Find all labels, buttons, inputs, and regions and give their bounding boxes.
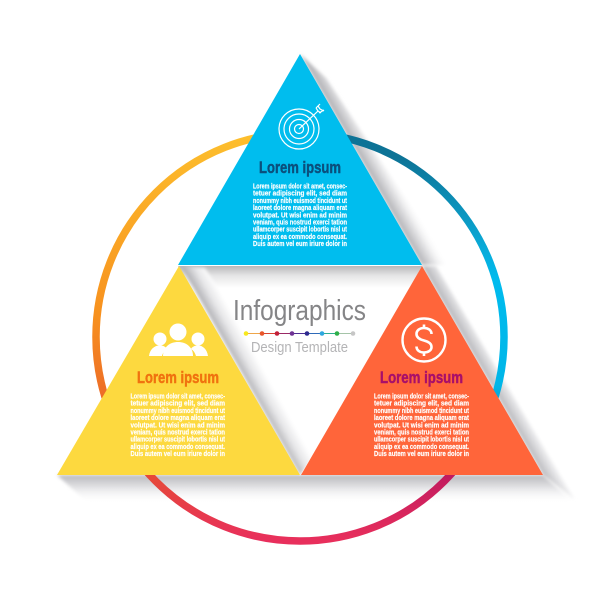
text block: right: veniam, quis nostrud exerci tation bbox=[374, 430, 469, 436]
infographic canvas bbox=[57, 54, 570, 545]
panel: top triangle bbox=[178, 54, 422, 265]
text block: left: nonummy nibh euismod tincidunt ut bbox=[130, 408, 226, 415]
text block: left: Lorem ipsum dolor sit amet, consec- bbox=[130, 394, 226, 400]
text block: left: tetuer adipiscing elit, sed diam bbox=[130, 401, 225, 408]
heading: right: Lorem ipsum bbox=[380, 368, 463, 387]
text block: left: ullamcorper suscipit lobortis nisl ut bbox=[130, 437, 226, 444]
icon: target with arrow bbox=[279, 104, 324, 149]
heading: top: Lorem ipsum bbox=[259, 158, 341, 177]
text block: right: volutpat. Ut wisi enim ad minim bbox=[374, 422, 469, 429]
text block: top bbox=[253, 184, 348, 248]
text block: right: aliquip ex ea commodo consequat. bbox=[374, 444, 469, 451]
text block: top: nonummy nibh euismod tincidunt ut bbox=[253, 198, 348, 205]
heading: left: Lorem ipsum bbox=[137, 368, 219, 387]
central panel bbox=[170, 266, 430, 476]
text block: top: veniam, quis nostrud exerci tation bbox=[253, 220, 347, 226]
shadow: right triangle right side bbox=[422, 266, 575, 500]
text block: left bbox=[130, 394, 226, 458]
icon: dollar coin bbox=[402, 318, 446, 362]
text block: left: veniam, quis nostrud exerci tation bbox=[130, 430, 225, 436]
panel: left triangle bbox=[57, 266, 300, 475]
text block: right: Lorem ipsum dolor sit amet, consec- bbox=[374, 394, 470, 400]
circular ring bbox=[96, 133, 504, 541]
text block: top: laoreet dolore magna aliquam erat bbox=[253, 205, 348, 212]
text block: right bbox=[374, 394, 470, 458]
subtitle: Design Template bbox=[251, 340, 348, 356]
icon: people bbox=[149, 324, 208, 356]
text block: top: aliquip ex ea commodo consequat. bbox=[253, 234, 347, 241]
text block: top: Duis autem vel eum iriure dolor in bbox=[253, 241, 347, 248]
text block: top: volutpat. Ut wisi enim ad minim bbox=[253, 212, 347, 219]
text block: right: laoreet dolore magna aliquam erat bbox=[374, 415, 470, 422]
text block: left: aliquip ex ea commodo consequat. bbox=[130, 444, 225, 451]
text block: top: Lorem ipsum dolor sit amet, consec- bbox=[253, 184, 348, 190]
text block: left: volutpat. Ut wisi enim ad minim bbox=[130, 422, 225, 429]
text block: right: nonummy nibh euismod tincidunt ut bbox=[374, 408, 470, 415]
panel: right triangle bbox=[301, 266, 543, 475]
title: Infographics bbox=[233, 295, 366, 327]
text block: right: tetuer adipiscing elit, sed diam bbox=[374, 401, 469, 408]
text block: left: Duis autem vel eum iriure dolor in bbox=[130, 451, 225, 458]
text block: left: laoreet dolore magna aliquam erat bbox=[130, 415, 226, 422]
text block: top: ullamcorper suscipit lobortis nisl ut bbox=[253, 227, 348, 234]
shadow: top triangle right side bbox=[300, 54, 450, 265]
dotted timeline bbox=[244, 331, 355, 336]
shadow: base of yellow and orange triangles bbox=[57, 475, 575, 503]
text block: right: Duis autem vel eum iriure dolor in bbox=[374, 451, 469, 458]
text block: top: tetuer adipiscing elit, sed diam bbox=[253, 191, 347, 198]
text block: right: ullamcorper suscipit lobortis nisl ut bbox=[374, 437, 470, 444]
